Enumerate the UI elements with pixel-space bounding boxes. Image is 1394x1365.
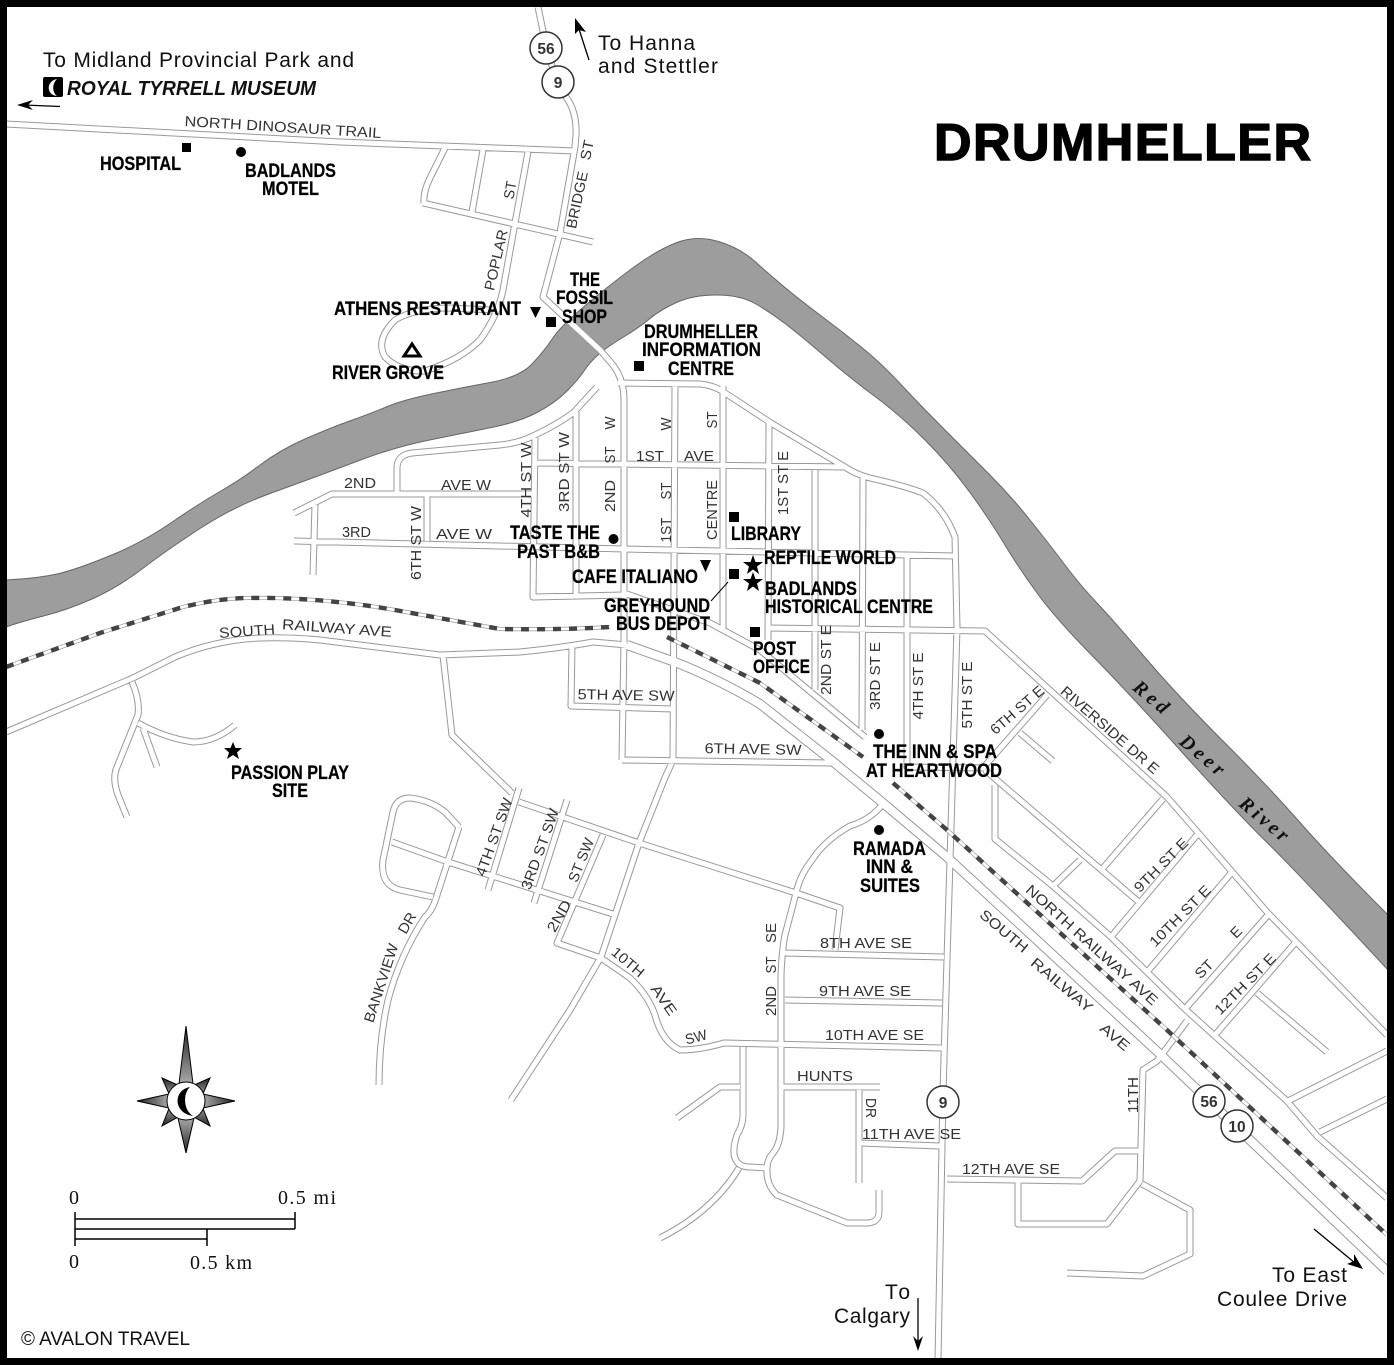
street: 1st St W: 1ST [659, 517, 675, 542]
directions: Calgary: To [885, 1281, 910, 1304]
street: 8th Ave SE: 8TH AVE SE [820, 936, 912, 952]
street: Riverside Dr E: RIVERSIDE DR E [1057, 684, 1162, 778]
place: The Fossil Shop: THE [570, 269, 600, 291]
street: 2nd St W: 2ND [603, 480, 619, 512]
river name [1128, 675, 1293, 847]
street: 1st St W: W [659, 417, 675, 430]
street: 6th St E: 6TH ST E [988, 683, 1048, 738]
place: The Fossil Shop [546, 269, 613, 328]
street: 10th Ave SW: SW [684, 1027, 709, 1049]
street: Dr: DR [862, 1098, 878, 1118]
directions: East Coulee Drive [1217, 1229, 1363, 1311]
street: Bankview Dr: DR [395, 910, 420, 937]
street: 3rd St W: 3RD ST W [557, 432, 573, 512]
street: 11th Ave SE: 11TH AVE SE [862, 1127, 961, 1143]
railway line [6, 598, 1387, 1235]
street: 3rd St E: 3RD ST E [868, 642, 884, 710]
street: 1st St W: ST [659, 482, 675, 500]
place: Taste the Past B&B [510, 522, 618, 563]
place: Taste the Past B&B: TASTE THE [510, 522, 600, 544]
street: 3rd St SW: 3RD ST SW [519, 806, 563, 892]
street: Bridge St: BRIDGE [564, 170, 592, 230]
place: The Inn & Spa at Heartwood: THE INN & SPA [873, 741, 997, 763]
street: Bridge St [564, 139, 598, 230]
street: 3rd Ave W: AVE W [436, 527, 492, 543]
shield: 56 east [1193, 1085, 1225, 1117]
arrow: south [913, 1298, 923, 1351]
word: Deer: Deer [1174, 730, 1229, 781]
scale bar: 0.5 km [190, 1252, 252, 1274]
directions: Midland and Royal Tyrrell Museum [17, 49, 354, 110]
place: Post Office: POST [753, 638, 796, 660]
street: 2nd St W [603, 416, 619, 512]
place: Badlands Historical Centre: HISTORICAL CENTRE [765, 596, 933, 618]
street: St E: ST [1192, 957, 1218, 982]
place: The Fossil Shop: SHOP [562, 306, 607, 328]
street: Centre St: CENTRE [705, 480, 721, 540]
place: Passion Play Site: PASSION PLAY [231, 762, 349, 784]
street: Bankview Dr: BANKVIEW [362, 942, 402, 1025]
compass rose [137, 1026, 235, 1153]
street: 2nd: 2ND [544, 898, 575, 935]
place: Passion Play Site: SITE [272, 780, 308, 802]
scale bar [69, 1187, 336, 1274]
place: Ramada Inn & Suites: INN & [866, 856, 913, 878]
street: 1st Ave: AVE [684, 449, 714, 465]
icon: moon highlight [43, 77, 63, 97]
street: 12th Ave SE: 12TH AVE SE [962, 1162, 1060, 1178]
street: St: ST [502, 180, 520, 200]
arrow: southeast [1314, 1229, 1363, 1269]
street: 10th St E: 10TH ST E [1147, 883, 1215, 951]
street: 1st St W [659, 417, 675, 542]
street: 2nd Ave W [344, 476, 491, 494]
place: Badlands Motel: MOTEL [262, 178, 319, 200]
place: Badlands Historical Centre: BADLANDS [765, 578, 857, 600]
place: Ramada Inn & Suites [853, 825, 926, 897]
place: Badlands Motel [236, 147, 336, 200]
street: 9th St E: 9TH ST E [1131, 835, 1192, 896]
street: 4th St E: 4TH ST E [911, 652, 927, 720]
place: Passion Play Site [224, 742, 349, 802]
shield: 9 south [927, 1086, 959, 1118]
scale bar: 0.5 mi [278, 1187, 336, 1209]
street: South Railway Ave west: SOUTH [219, 622, 276, 642]
shield: 9 south: 9 [939, 1095, 948, 1112]
place: Library: LIBRARY [731, 523, 801, 545]
place: Badlands Historical Centre [743, 572, 933, 618]
street: 2nd St SE: 2ND [764, 986, 780, 1016]
place: Badlands Motel: BADLANDS [245, 160, 336, 182]
directions: Hanna and Stettler: and Stettler [598, 55, 718, 78]
shield: 56 north: 56 [537, 41, 555, 58]
title: DRUMHELLER [934, 114, 1311, 172]
street: St SW: ST SW [566, 836, 598, 885]
street: Poplar: POPLAR [482, 228, 512, 292]
street: 10th Ave SE: 10TH AVE SE [825, 1028, 924, 1044]
shield: 10 [1221, 1110, 1253, 1142]
copyright: © AVALON TRAVEL [21, 1329, 190, 1350]
shield: 56 east: 56 [1200, 1094, 1218, 1111]
shield: 9 north [542, 66, 574, 98]
street: South Railway Ave west: RAILWAY AVE [282, 617, 393, 641]
place: Drumheller Information Centre: INFORMATION [642, 339, 761, 361]
street: South Railway Ave east: AVE [1096, 1021, 1133, 1055]
street: 2nd St W: ST [603, 446, 619, 464]
street: North Dinosaur Trail: NORTH DINOSAUR TRAIL [184, 114, 382, 142]
word: Red: Red [1128, 675, 1174, 719]
street: South Railway Ave west [219, 617, 393, 642]
arrow: west [17, 100, 60, 110]
street: 2nd St SE: ST [764, 956, 780, 974]
place: The Inn & Spa at Heartwood [866, 729, 1002, 782]
river: Red Deer River [6, 238, 1388, 970]
place: Greyhound Bus Depot: GREYHOUND [604, 595, 710, 617]
word: River: River [1234, 792, 1293, 847]
place: Drumheller Information Centre: CENTRE [668, 358, 734, 380]
street: Centre St: ST [705, 411, 721, 428]
street: 6th Ave SW: 6TH AVE SW [704, 741, 802, 759]
place: Hospital: HOSPITAL [100, 153, 181, 175]
directions: Midland and Royal Tyrrell Museum: To Midland Provincial Park and [43, 49, 354, 72]
place: Ramada Inn & Suites: SUITES [860, 875, 920, 897]
street: Hunts: HUNTS [797, 1069, 853, 1085]
street: 3rd Ave W [342, 525, 492, 543]
place: River Grove: RIVER GROVE [332, 362, 444, 384]
street: 6th St W: 6TH ST W [409, 506, 425, 580]
street: Bridge St: ST [578, 139, 598, 162]
street: 10th Ave SW [608, 944, 709, 1049]
street: 2nd Ave W: 2ND [344, 476, 376, 492]
street: Centre St [705, 411, 721, 540]
street: 1st Ave [636, 449, 714, 465]
arrow: north [575, 18, 589, 60]
place: Post Office [750, 627, 810, 678]
street: South Railway Ave east: RAILWAY [1027, 955, 1096, 1017]
street: 3rd Ave W: 3RD [342, 525, 371, 541]
street: 2nd St E: 2ND ST E [819, 625, 835, 695]
scale bar: 0 [69, 1187, 79, 1209]
place: The Fossil Shop: FOSSIL [556, 287, 613, 309]
place: Taste the Past B&B: PAST B&B [517, 541, 600, 563]
directions: Hanna and Stettler: To Hanna [598, 32, 695, 55]
street: 1st St E: 1ST ST E [776, 451, 792, 515]
street: St E [1192, 923, 1246, 982]
place: River Grove [332, 344, 444, 384]
place: The Inn & Spa at Heartwood: AT HEARTWOOD [866, 760, 1002, 782]
place: Athens Restaurant: ATHENS RESTAURANT [334, 298, 521, 320]
directions: East Coulee Drive: To East [1272, 1264, 1347, 1287]
directions: Midland and Royal Tyrrell Museum: ROYAL TYRRELL MUSEUM [67, 78, 317, 100]
street: 2nd St SE: SE [764, 923, 780, 943]
place: Greyhound Bus Depot: BUS DEPOT [616, 613, 710, 635]
shield: 9 north: 9 [554, 75, 563, 92]
street: Bankview Dr [362, 910, 420, 1025]
highway shields [530, 32, 1253, 1142]
place: Post Office: OFFICE [753, 656, 810, 678]
place: Cafe Italiano: CAFE ITALIANO [572, 566, 698, 588]
street: 2nd St SE [764, 923, 780, 1016]
street: 2nd Ave W: AVE W [441, 478, 491, 494]
street: North Railway Ave: NORTH RAILWAY AVE [1022, 882, 1161, 1009]
street: 10th Ave SW: 10TH [608, 944, 647, 981]
shield: 56 north [530, 32, 562, 64]
street: 2nd St W: W [603, 416, 619, 430]
directions: Hanna and Stettler [575, 18, 718, 78]
street: 9th Ave SE: 9TH AVE SE [819, 984, 911, 1000]
place: Library [729, 512, 801, 545]
place: Drumheller Information Centre: DRUMHELLER [644, 321, 758, 343]
street: St E: E [1228, 923, 1246, 942]
place: Reptile World [743, 547, 896, 574]
place: Greyhound Bus Depot [604, 569, 739, 635]
street: 5th St E: 5TH ST E [960, 661, 976, 728]
street: 4th St SW: 4TH ST SW [473, 796, 517, 879]
street: 1st Ave: 1ST [636, 449, 664, 465]
street: 11th: 11TH [1126, 1077, 1142, 1113]
place: Ramada Inn & Suites: RAMADA [853, 838, 926, 860]
directions: East Coulee Drive: Coulee Drive [1217, 1288, 1347, 1311]
scale bar: 0 [69, 1251, 79, 1273]
street: South Railway Ave east [976, 907, 1133, 1055]
street: South Railway Ave east: SOUTH [976, 907, 1031, 957]
street: 10th Ave SW: AVE [647, 982, 680, 1019]
place: Hospital [100, 143, 191, 175]
place: Drumheller Information Centre [634, 321, 761, 380]
street: 12th St E: 12TH ST E [1212, 951, 1280, 1019]
shield: 10: 10 [1228, 1119, 1246, 1136]
street labels [184, 114, 1280, 1178]
street: 4th St W: 4TH ST W [519, 442, 535, 518]
street: 5th Ave SW: 5TH AVE SW [577, 687, 675, 705]
directions: Calgary: Calgary [834, 1305, 910, 1328]
place: Reptile World: REPTILE WORLD [764, 547, 896, 569]
directions: Calgary [834, 1281, 923, 1351]
